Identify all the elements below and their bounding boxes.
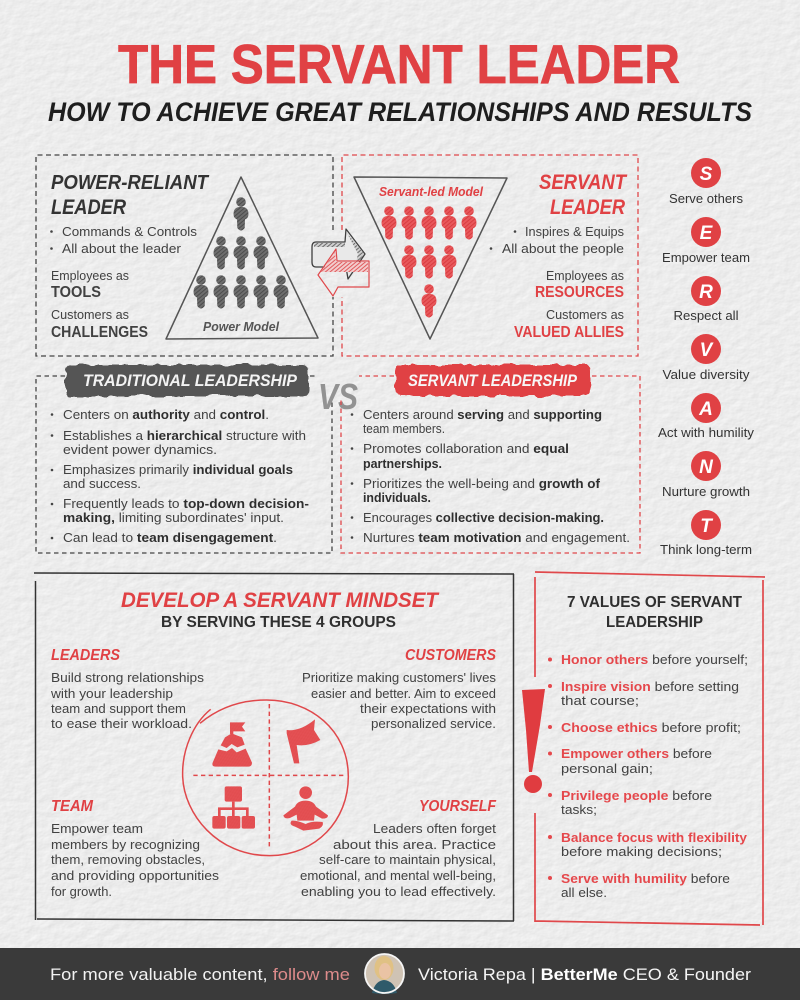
subtitle: HOW TO ACHIEVE GREAT RELATIONSHIPS AND RESULTS bbox=[48, 97, 752, 127]
group: yourself: self-care to maintain physical, bbox=[319, 852, 496, 867]
servant traits list: Inspires & Equips bbox=[525, 224, 624, 239]
N: nurture growth bbox=[662, 451, 750, 499]
panel: power-reliant leader bbox=[36, 155, 333, 356]
group: yourself: enabling you to lead effectively. bbox=[301, 884, 496, 899]
heading: 7 values: 7 VALUES OF SERVANT bbox=[567, 594, 742, 611]
servant traits list bbox=[490, 224, 624, 256]
group: team: for growth. bbox=[51, 884, 112, 899]
heading: 7 values: LEADERSHIP bbox=[606, 614, 703, 631]
group: yourself: emotional, and mental well-being, bbox=[300, 868, 496, 883]
heading: servant leader bbox=[539, 171, 628, 219]
S: serve others bbox=[669, 158, 743, 206]
customers as challenges: CHALLENGES bbox=[51, 324, 148, 341]
traits list: Commands & Controls bbox=[62, 224, 198, 239]
group: team: and providing opportunities bbox=[51, 868, 220, 883]
panel: servant leader bbox=[342, 155, 638, 356]
values list bbox=[548, 652, 748, 900]
values list: Balance focus with flexibility bbox=[561, 830, 748, 845]
arrows: switching models bbox=[312, 229, 369, 296]
panel: develop a servant mindset bbox=[34, 573, 514, 921]
banner: traditional leadership bbox=[66, 365, 309, 396]
A: act with humility bbox=[658, 393, 755, 440]
customers as valued allies: Customers as bbox=[546, 307, 624, 322]
heading: servant leader: SERVANT bbox=[539, 171, 628, 194]
group: team bbox=[51, 798, 220, 899]
group: team: Empower team bbox=[51, 821, 143, 836]
group: yourself: Leaders often forget bbox=[373, 821, 496, 836]
traits list: All about the leader bbox=[62, 241, 182, 256]
values list: Serve with humility before bbox=[561, 871, 730, 886]
R: respect all: Respect all bbox=[674, 309, 738, 323]
footer call to action: For more valuable content, follow me bbox=[50, 965, 350, 984]
footer bar bbox=[0, 948, 800, 1000]
heading: develop a servant mindset bbox=[121, 589, 440, 631]
T: think long-term: T bbox=[700, 516, 713, 537]
values list: Honor others before yourself; bbox=[561, 652, 748, 667]
employees as resources: RESOURCES bbox=[535, 284, 624, 301]
servant-led model triangle bbox=[354, 177, 507, 339]
title: THE SERVANT LEADER bbox=[118, 33, 680, 95]
power model triangle bbox=[166, 177, 318, 339]
customers as challenges: Customers as bbox=[51, 307, 129, 322]
group: team: them, removing obstacles, bbox=[51, 852, 205, 867]
E: empower team: E bbox=[700, 223, 714, 244]
group: leaders: to ease their workload. bbox=[51, 716, 192, 731]
traditional leadership list: Frequently leads to top-down decision- bbox=[63, 497, 309, 511]
versus mark: VS bbox=[318, 376, 358, 417]
traditional leadership list bbox=[51, 408, 309, 545]
group: leaders: Build strong relationships bbox=[51, 670, 205, 685]
V: value diversity: Value diversity bbox=[662, 368, 750, 382]
author photo bbox=[365, 954, 404, 994]
panel: servant leadership bbox=[341, 365, 640, 553]
employees as resources: Employees as bbox=[546, 268, 624, 283]
group: team: members by recognizing bbox=[51, 837, 200, 852]
circle diagram with four icons bbox=[183, 700, 348, 856]
group: leaders bbox=[50, 647, 205, 731]
values list: Empower others before bbox=[561, 746, 712, 761]
servant leadership list: Prioritizes the well-being and growth of bbox=[363, 477, 601, 491]
servant leadership list: Encourages collective decision-making. bbox=[363, 511, 604, 525]
SERVE acronym column bbox=[658, 158, 755, 557]
power model triangle: Power Model bbox=[203, 319, 279, 334]
servant leadership list: team members. bbox=[363, 422, 445, 436]
V: value diversity: V bbox=[700, 340, 714, 361]
servant traits list: All about the people bbox=[502, 241, 624, 256]
employees as tools: Employees as bbox=[51, 268, 129, 283]
icon: org chart bbox=[212, 786, 255, 829]
traditional leadership list: and success. bbox=[63, 477, 141, 491]
icon: flag bbox=[287, 719, 320, 763]
group: customers bbox=[302, 647, 496, 731]
values list: Inspire vision before setting bbox=[561, 679, 739, 694]
traditional leadership list: making, limiting subordinates' input. bbox=[63, 511, 284, 525]
E: empower team: Empower team bbox=[662, 251, 750, 265]
E: empower team bbox=[662, 217, 750, 265]
servant leadership list bbox=[351, 408, 630, 545]
traditional leadership list: Can lead to team disengagement . bbox=[63, 531, 277, 545]
group: customers: Prioritize making customers' lives bbox=[302, 670, 496, 685]
icon: meditating person bbox=[283, 786, 328, 831]
group: customers: their expectations with bbox=[360, 701, 496, 716]
servant leadership list: individuals. bbox=[363, 491, 431, 505]
values list: all else. bbox=[561, 885, 607, 900]
N: nurture growth: Nurture growth bbox=[662, 485, 750, 499]
heading: develop a servant mindset: BY SERVING THESE 4 GROUPS bbox=[161, 614, 396, 631]
traits list bbox=[50, 224, 198, 256]
customers as valued allies bbox=[514, 307, 624, 341]
servant leadership list: Promotes collaboration and equal bbox=[363, 442, 569, 456]
values list: personal gain; bbox=[561, 761, 653, 776]
A: act with humility: Act with humility bbox=[658, 426, 755, 440]
icon: mountain with flag bbox=[212, 722, 252, 767]
N: nurture growth: N bbox=[699, 457, 714, 478]
group: customers: CUSTOMERS bbox=[405, 647, 496, 664]
group: leaders: team and support them bbox=[51, 701, 186, 716]
banner: traditional leadership: TRADITIONAL LEADERSHIP bbox=[83, 371, 298, 390]
servant leadership list: Nurtures team motivation and engagement. bbox=[363, 531, 630, 545]
S: serve others: Serve others bbox=[669, 192, 743, 206]
group: yourself: YOURSELF bbox=[419, 798, 497, 815]
traditional leadership list: evident power dynamics. bbox=[63, 443, 217, 457]
T: think long-term: Think long-term bbox=[660, 543, 752, 557]
traditional leadership list: Emphasizes primarily individual goals bbox=[63, 463, 293, 477]
group: yourself bbox=[300, 798, 497, 899]
employees as tools bbox=[51, 268, 129, 301]
values list: tasks; bbox=[561, 802, 597, 817]
panel: traditional leadership bbox=[36, 365, 332, 553]
banner: servant leadership: SERVANT LEADERSHIP bbox=[408, 371, 578, 390]
heading: power-reliant leader bbox=[51, 172, 210, 219]
servant-led model triangle: Servant-led Model bbox=[379, 184, 483, 199]
employees as tools: TOOLS bbox=[51, 284, 101, 301]
S: serve others: S bbox=[700, 164, 713, 185]
author name: Victoria Repa | BetterMe CEO & Founder bbox=[418, 965, 751, 984]
T: think long-term bbox=[660, 510, 752, 557]
panel: 7 values of servant leadership bbox=[522, 572, 765, 925]
group: leaders: with your leadership bbox=[50, 686, 173, 701]
heading: develop a servant mindset: DEVELOP A SERVANT MINDSET bbox=[121, 589, 440, 612]
servant leadership list: partnerships. bbox=[363, 457, 442, 471]
banner: servant leadership bbox=[395, 365, 591, 396]
employees as resources bbox=[535, 268, 624, 301]
customers as valued allies: VALUED ALLIES bbox=[514, 324, 624, 341]
group: customers: personalized service. bbox=[371, 716, 496, 731]
heading: 7 values bbox=[567, 594, 742, 631]
heading: servant leader: LEADER bbox=[550, 196, 626, 219]
group: yourself: about this area. Practice bbox=[333, 837, 496, 852]
traditional leadership list: Establishes a hierarchical structure with bbox=[63, 429, 306, 443]
values list: that course; bbox=[561, 693, 639, 708]
A: act with humility: A bbox=[698, 399, 713, 420]
group: customers: easier and better. Aim to exceed bbox=[311, 686, 496, 701]
V: value diversity bbox=[662, 334, 750, 382]
R: respect all: R bbox=[699, 282, 713, 303]
heading: power-reliant leader: LEADER bbox=[51, 196, 127, 219]
group: team: TEAM bbox=[51, 798, 94, 815]
R: respect all bbox=[674, 276, 738, 323]
exclamation mark bbox=[522, 689, 545, 793]
customers as challenges bbox=[51, 307, 148, 341]
group: leaders: LEADERS bbox=[51, 647, 120, 664]
values list: Choose ethics before profit; bbox=[561, 720, 741, 735]
traditional leadership list: Centers on authority and control . bbox=[63, 408, 269, 422]
servant leadership list: Centers around serving and supporting bbox=[363, 408, 602, 422]
values list: Privilege people before bbox=[561, 788, 712, 803]
values list: before making decisions; bbox=[561, 844, 722, 859]
heading: power-reliant leader: POWER-RELIANT bbox=[51, 172, 210, 194]
